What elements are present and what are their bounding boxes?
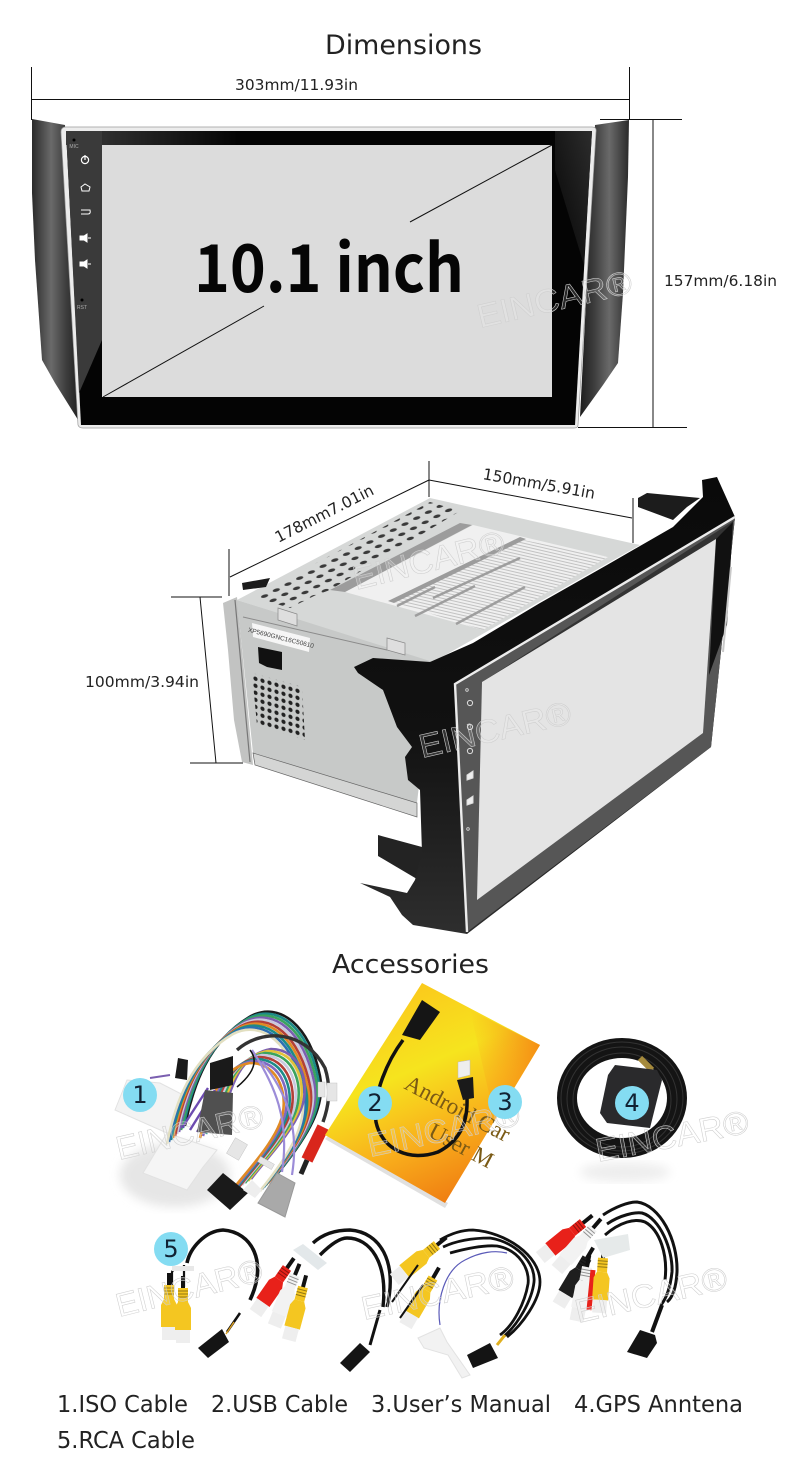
- number badge 1: [123, 1078, 157, 1112]
- number badge 4: 4: [624, 1089, 640, 1117]
- number badge 2: 2: [367, 1089, 383, 1117]
- watermarks: EINCAR®: [415, 694, 575, 765]
- front view of head unit: [32, 119, 636, 428]
- accessory: RCA cable B: [249, 1230, 390, 1372]
- wire bundle: [167, 1012, 321, 1193]
- top hook: [638, 493, 700, 520]
- right bezel sheen: [555, 131, 592, 265]
- depth dimension lines: 150mm/5.91in: [481, 465, 597, 503]
- small black connectors: [175, 1056, 233, 1090]
- size label: 10.1 inch: [194, 216, 464, 312]
- corner clip: [242, 578, 270, 590]
- front screen: [477, 539, 716, 900]
- top holes: [253, 502, 460, 608]
- black bracket: [354, 477, 735, 934]
- silver frame: [61, 127, 596, 428]
- white plug: [243, 1180, 262, 1198]
- accessory: RCA cable A: [161, 1230, 258, 1358]
- title: Dimensions: Dimensions: [325, 30, 482, 61]
- bottom watermarks: EINCAR®: [112, 1252, 266, 1324]
- number badge 5: 5: [163, 1235, 179, 1263]
- black bezel: [66, 131, 592, 425]
- chassis top: [237, 498, 640, 662]
- height dimension line: [578, 119, 777, 428]
- frame rim: [455, 517, 735, 932]
- gray connector: [258, 1173, 295, 1217]
- number badge 5: [154, 1232, 188, 1266]
- front buttons: [466, 689, 473, 830]
- red plug: [307, 1127, 323, 1160]
- width dimension line: 303mm/11.93in: [235, 76, 358, 94]
- accessories legend: 4.GPS Anntena: [574, 1392, 743, 1418]
- bottom watermarks: EINCAR®: [571, 1259, 731, 1330]
- number badge 3: 3: [497, 1088, 513, 1116]
- front frame: [455, 517, 735, 932]
- black connector: [207, 1173, 248, 1210]
- accessory: user's manual: [325, 983, 540, 1208]
- accessory: RCA cable C: [389, 1230, 540, 1378]
- black cable: [237, 1036, 329, 1122]
- right trim wing: [580, 120, 629, 417]
- button panel: [66, 131, 102, 393]
- spec sticker: [345, 525, 608, 630]
- serial sticker: [252, 623, 310, 652]
- power slot: [258, 647, 282, 670]
- accessories legend: 3.User’s Manual: [371, 1392, 551, 1418]
- chassis side: [237, 600, 433, 803]
- chassis flange: [223, 597, 253, 765]
- bottom watermarks: [112, 1252, 731, 1330]
- bottom watermarks: EINCAR®: [358, 1258, 517, 1327]
- top bezel sheen: [66, 131, 236, 145]
- frame black band: [709, 521, 733, 675]
- accessory: GPS antenna: EINCAR®: [592, 1103, 751, 1169]
- side buttons: [69, 138, 91, 311]
- depth dimension lines: 178mm7.01in: [272, 481, 377, 547]
- accessory: user's manual: User M: [425, 1118, 498, 1173]
- side buttons: RST: [77, 305, 87, 311]
- depth dimension lines: [229, 461, 633, 596]
- number badge 2: [358, 1086, 392, 1120]
- accessory: user's manual: Android Car: [401, 1070, 515, 1147]
- accessories legend: 1.ISO Cable: [57, 1392, 188, 1418]
- accessory: USB cable: [375, 1000, 474, 1155]
- vent holes: [252, 673, 305, 740]
- side buttons: MIC: [69, 144, 79, 150]
- accessory: ISO cable harness: EINCAR®: [112, 1097, 267, 1167]
- accessory: RCA cable D: [535, 1202, 677, 1358]
- left trim wing: [32, 119, 80, 423]
- accessory: ISO cable harness: [112, 1012, 337, 1217]
- side height dimension line: 100mm/3.94in: [85, 673, 199, 691]
- accessories legend: 2.USB Cable: [211, 1392, 348, 1418]
- number badge 4: [615, 1086, 649, 1120]
- side height dimension line: [85, 597, 243, 763]
- perspective view of head unit: [223, 477, 735, 934]
- accessories legend: 5.RCA Cable: [57, 1428, 195, 1454]
- accessory: user's manual: EINCAR®: [364, 1095, 523, 1164]
- perspective view of head unit: EINCAR®: [349, 523, 508, 597]
- height dimension line: 157mm/6.18in: [664, 272, 777, 290]
- white connectors: [115, 1080, 193, 1133]
- screen diagonal: [103, 145, 552, 397]
- perspective view of head unit: XP5690GNC16C50610: [247, 627, 315, 650]
- lower plate: [253, 753, 417, 817]
- number badge 3: [488, 1085, 522, 1119]
- width dimension line: [31, 67, 630, 120]
- accessory: GPS antenna: [561, 1042, 751, 1182]
- number badge 1: 1: [132, 1081, 148, 1109]
- lower hook: [378, 835, 422, 882]
- accessories legend: [57, 1392, 743, 1454]
- screen: [102, 145, 552, 397]
- clips: [278, 608, 405, 655]
- tags: [226, 1082, 337, 1170]
- heading: Accessories: Accessories: [332, 950, 489, 980]
- rear chrome: [723, 567, 731, 652]
- foam block: [197, 1090, 233, 1135]
- watermark: EINCAR®: [473, 263, 636, 335]
